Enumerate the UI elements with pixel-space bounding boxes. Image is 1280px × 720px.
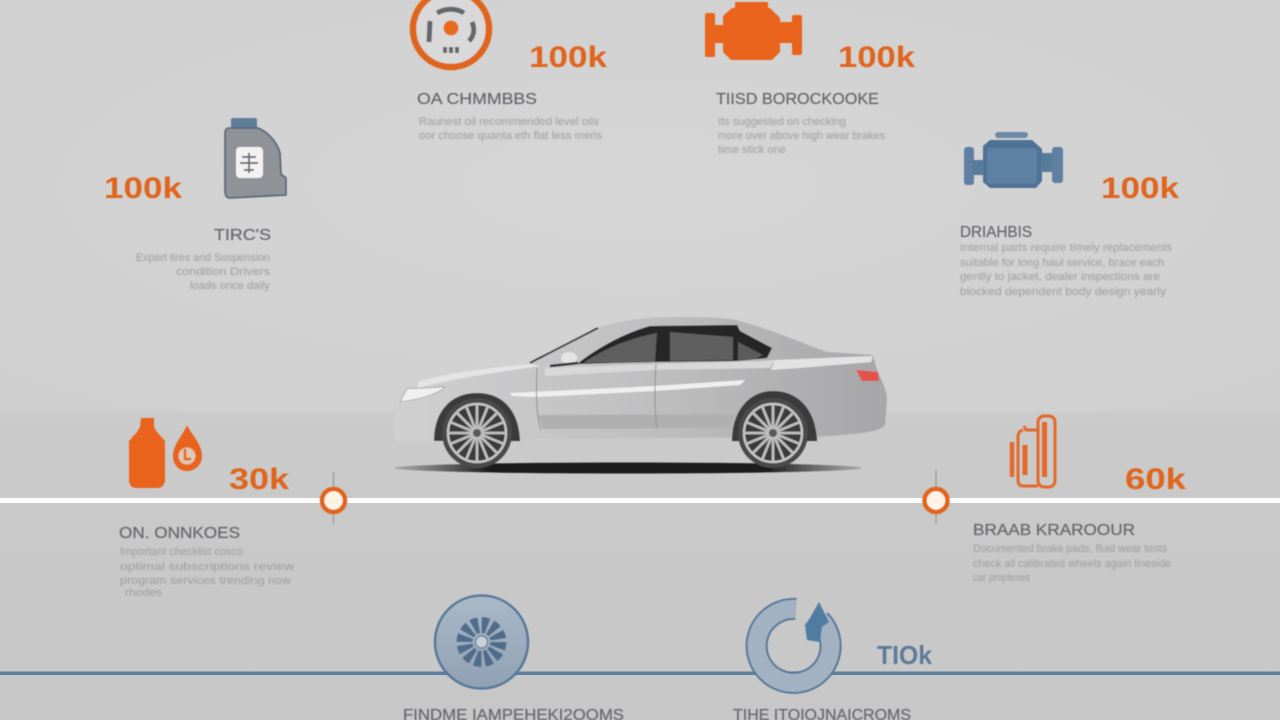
panel: lower left xyxy=(119,418,294,599)
heading: ON. ONNKOES xyxy=(119,525,240,542)
heading: OA CHMMBBS xyxy=(417,91,537,108)
description: car proplexes xyxy=(973,572,1030,584)
door lines xyxy=(536,364,657,430)
panel: lower right xyxy=(973,416,1186,584)
panel: top centre-right xyxy=(705,2,915,156)
panel: upper right xyxy=(960,132,1179,298)
value: 110k: TIOk xyxy=(877,640,933,670)
description: Expert tires and Suspension xyxy=(136,252,270,264)
description xyxy=(136,252,271,292)
mirror xyxy=(561,352,577,364)
description: blocked dependent body design yearly xyxy=(960,286,1167,298)
description: optimal subscriptions review xyxy=(120,561,294,573)
timeline marker: 60k xyxy=(924,470,948,524)
icon: orange oil bottle and drop xyxy=(129,418,202,488)
icon: blue engine xyxy=(964,132,1063,188)
lower door band xyxy=(538,414,735,429)
description: time stick one xyxy=(718,144,786,156)
description: condition Drivers xyxy=(176,266,271,278)
description: more over above high wear brakes xyxy=(718,130,885,142)
value: 60k: 60k xyxy=(1125,463,1186,496)
white timeline xyxy=(0,472,1280,524)
car illustration xyxy=(394,317,887,474)
description xyxy=(120,546,294,599)
description: program services trending now xyxy=(120,575,291,587)
car body xyxy=(394,317,887,442)
icon: orange gauge xyxy=(413,0,489,67)
description: suitable for long haul service, brace each xyxy=(960,257,1164,269)
value: 30k: 30k xyxy=(229,463,289,496)
windows xyxy=(577,325,772,364)
car shadow xyxy=(394,462,862,474)
rear wheel xyxy=(732,391,817,468)
description xyxy=(718,116,885,156)
description xyxy=(960,242,1173,298)
description: Important checklist cosco xyxy=(120,546,243,558)
panel: upper left xyxy=(104,118,286,292)
description: rhodes xyxy=(125,587,163,599)
heading: BRAAB KRAROOUR xyxy=(973,522,1135,539)
value: 100k: 100k xyxy=(838,41,915,74)
hood highlight xyxy=(418,364,540,388)
description: Documented brake pads, fluid wear tests xyxy=(973,543,1167,555)
headlight xyxy=(400,387,445,402)
panel: bottom left xyxy=(403,596,624,720)
value: 100k: 100k xyxy=(104,172,182,205)
blue timeline xyxy=(0,672,1280,675)
front wheel xyxy=(434,393,520,468)
tail light xyxy=(856,370,879,381)
windshield line xyxy=(530,328,598,363)
description xyxy=(419,116,603,142)
panel: bottom right xyxy=(733,602,933,720)
description xyxy=(973,543,1171,584)
description: Its suggested on checking xyxy=(718,116,846,128)
heading: TIRC'S xyxy=(214,227,271,244)
panel: top centre-left xyxy=(413,0,607,142)
description: Internal parts require timely replacements xyxy=(960,242,1173,254)
icon: blue rotation ring xyxy=(757,602,831,683)
heading: DRIAHBIS xyxy=(960,224,1032,241)
value: 100k: 100k xyxy=(529,41,607,74)
icon: orange fluid tubes xyxy=(1012,416,1055,487)
icon: orange engine xyxy=(705,2,802,60)
description: Raunest oil recommended level oils xyxy=(419,116,600,128)
icon: grey oil jug xyxy=(225,118,286,198)
value: 100k: 100k xyxy=(1101,172,1179,205)
icon: blue wheel xyxy=(435,596,528,688)
description: check all calibrated wheels again lineside xyxy=(973,558,1171,570)
waist and door highlights xyxy=(545,360,775,376)
heading: TIISD BOROCKOOKE xyxy=(716,91,879,108)
description: gently to jacket, dealer inspections are xyxy=(960,271,1160,283)
timeline marker: 30k xyxy=(322,472,345,524)
description: loads once daily xyxy=(190,280,271,292)
description: oor choose quanta eth flat less meris xyxy=(419,130,603,142)
